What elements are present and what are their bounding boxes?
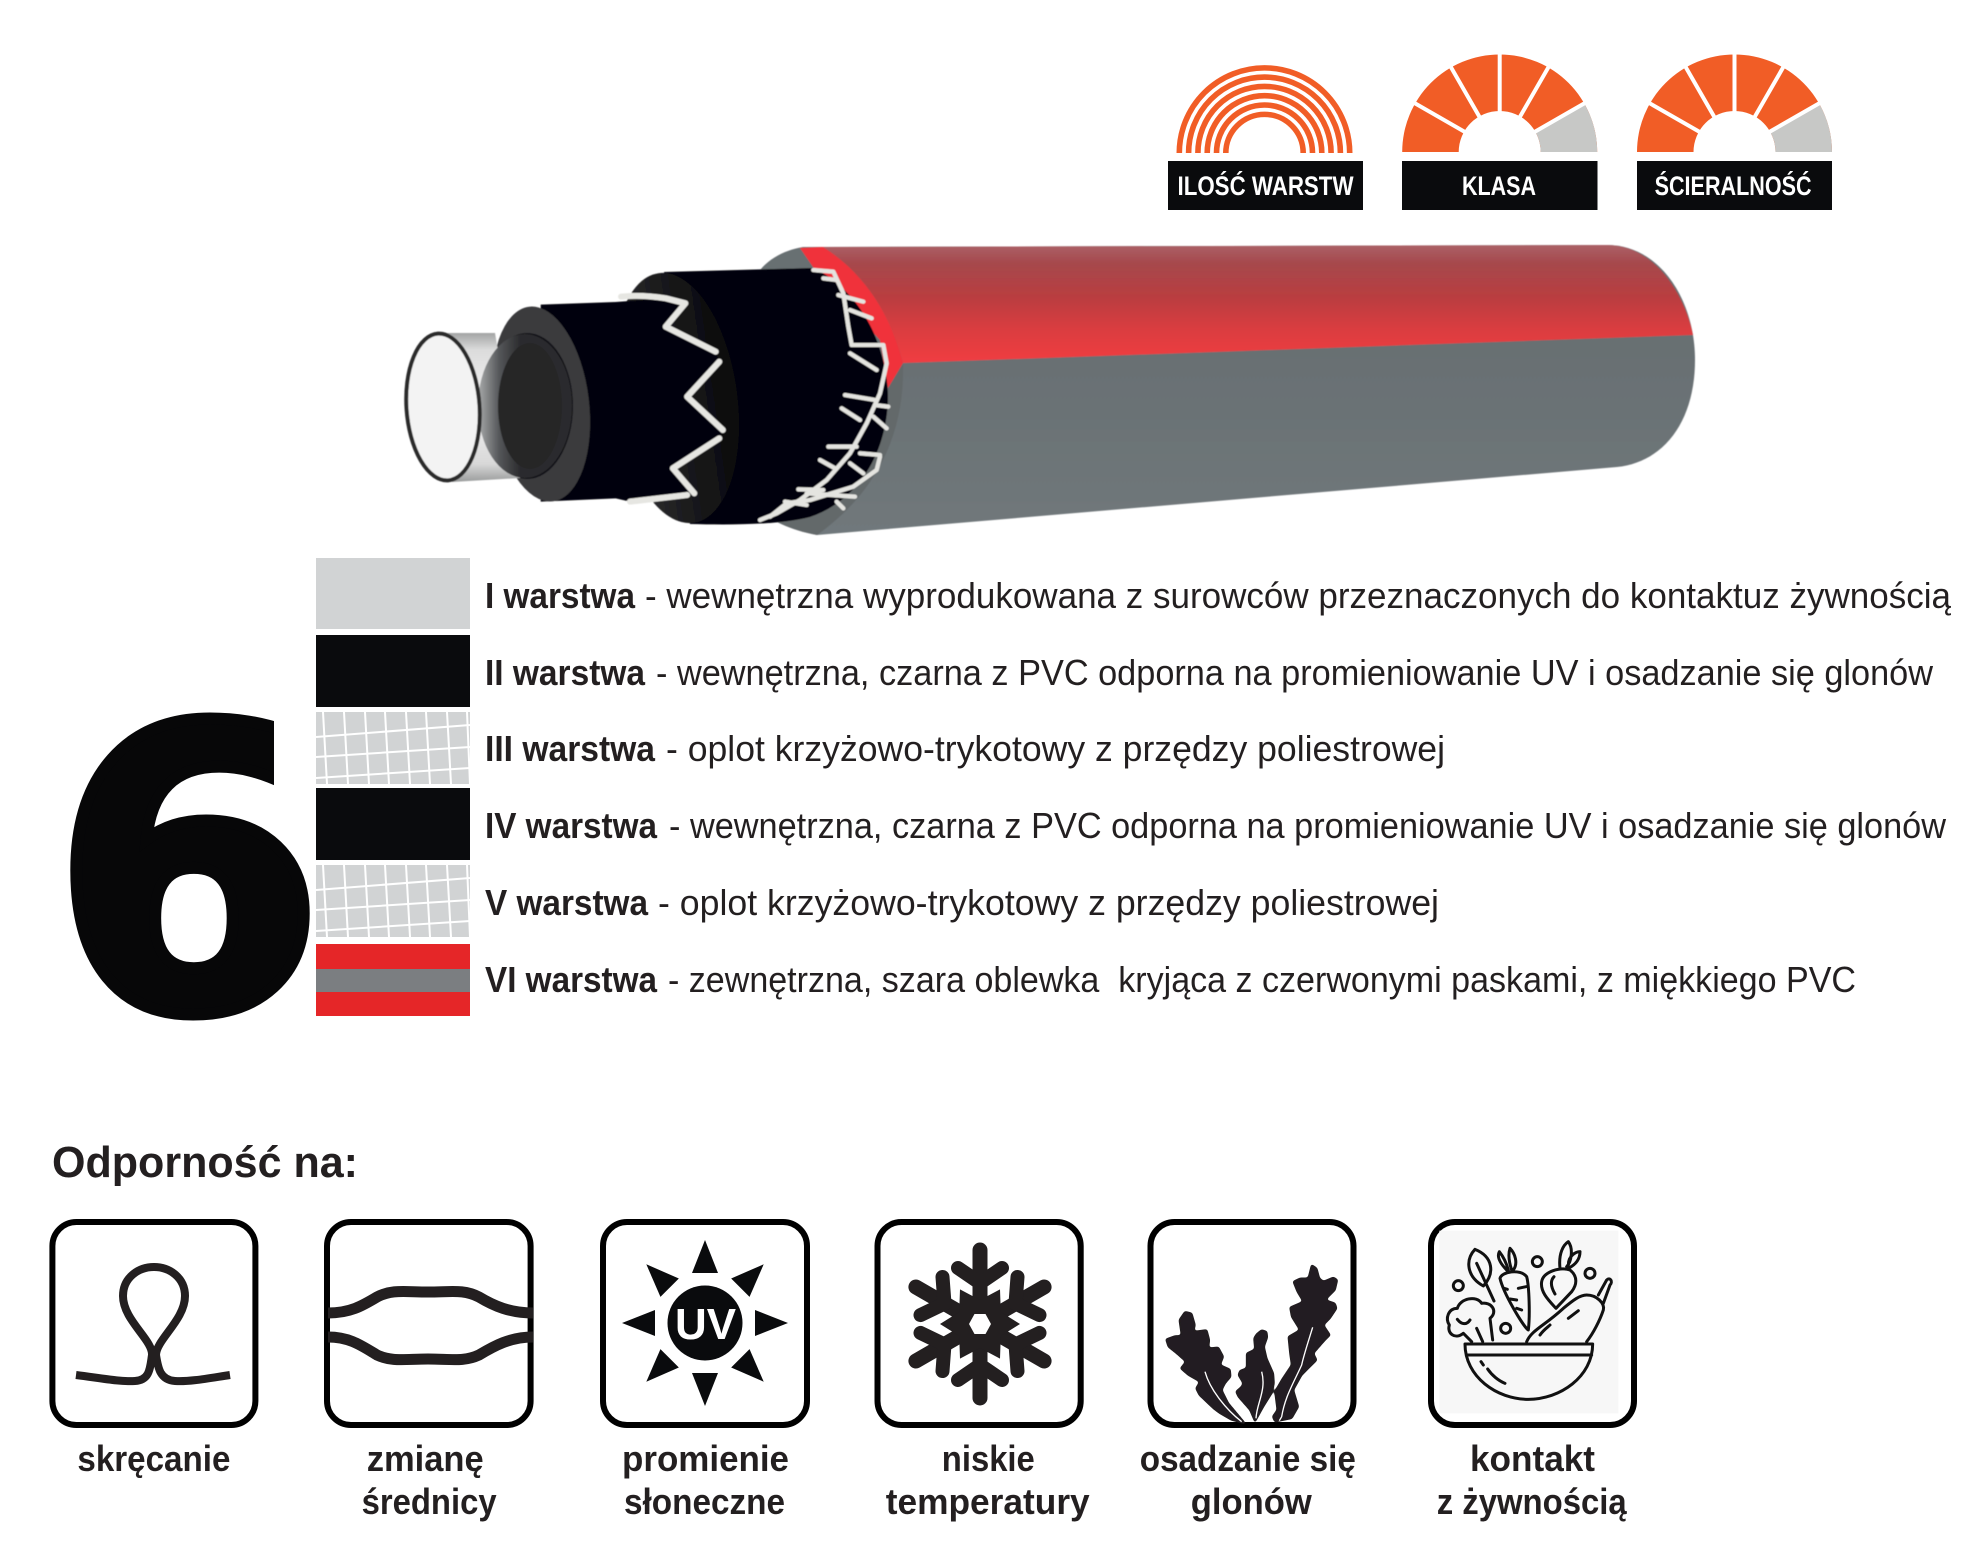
gray cut face: [760, 300, 903, 535]
inner braid zigzag: [621, 296, 723, 502]
text: layer V: V warstwa: [485, 882, 649, 923]
icon tile: food contact: [1431, 1222, 1634, 1425]
big number 6: 6: [52, 646, 325, 1102]
label: food contact: z żywnością: [1437, 1481, 1628, 1522]
icon tile: UV sun: UV: [675, 1300, 737, 1349]
icon tile: low temperature snowflake: [878, 1222, 1081, 1425]
label: ilość warstw: ILOŚĆ WARSTW: [1178, 170, 1354, 201]
outer braid: [760, 270, 888, 520]
label: algae: osadzanie się: [1140, 1438, 1356, 1479]
text: layer VI: - zewnętrzna, szara oblewka kryjąca z czerwonymi paskami, z miękkiego PVC: [668, 959, 1856, 1000]
text: layer VI: VI warstwa: [485, 959, 658, 1000]
text: layer I: - wewnętrzna wyprodukowana z surowców przeznaczonych do kontaktuz żywnością: [645, 575, 1952, 616]
icon: class gauge: [1402, 52, 1597, 152]
text: layer I: I warstwa: [485, 575, 636, 616]
swatch: layer II: [316, 635, 470, 707]
text: layer IV: IV warstwa: [485, 805, 658, 846]
label: food contact: [1437, 1438, 1628, 1522]
heading: resistance: Odporność na:: [52, 1138, 358, 1187]
swatch: layer VI: [316, 944, 470, 1016]
red stripe: [823, 245, 1693, 363]
label: low temperatures: niskie: [942, 1438, 1035, 1479]
icon tile: diameter change: [327, 1222, 533, 1425]
label: ilość warstw: [1168, 161, 1363, 210]
label: diameter change: zmianę: [367, 1438, 484, 1479]
label: klasa: KLASA: [1462, 171, 1536, 201]
label: low temperatures: [886, 1438, 1090, 1522]
bright red cut face: [800, 247, 903, 388]
text: layer II: II warstwa: [485, 652, 646, 693]
tube layer II face: [481, 301, 601, 507]
swatch: layer V mesh: [316, 865, 470, 937]
label: sunlight: [622, 1438, 789, 1522]
text: layer II: - wewnętrzna, czarna z PVC odporna na promieniowanie UV i osadzanie się glonów: [656, 652, 1934, 693]
clear inner tube: [440, 333, 520, 482]
icon tile: twisting: [52, 1222, 255, 1425]
label: low temperatures: temperatury: [886, 1481, 1090, 1522]
label: sunlight: promienie: [622, 1438, 789, 1479]
text: layer III: - oplot krzyżowo-trykotowy z przędzy poliestrowej: [666, 728, 1445, 769]
label: diameter change: [362, 1438, 497, 1522]
label: sunlight: słoneczne: [624, 1481, 785, 1522]
text: layer III: III warstwa: [485, 728, 656, 769]
label: algae: glonów: [1191, 1481, 1313, 1522]
outer gray jacket: [760, 245, 1695, 535]
black tube layer IV: [664, 268, 888, 524]
text: layer V: - oplot krzyżowo-trykotowy z przędzy poliestrowej: [658, 882, 1439, 923]
swatch: layer IV: [316, 788, 470, 860]
label: twisting: skręcanie: [77, 1438, 230, 1479]
icon tile: algae: [1150, 1222, 1354, 1425]
swatch: layer I: [316, 558, 470, 629]
swatch: layer III mesh: [316, 712, 470, 784]
tube face: [598, 265, 754, 531]
black tube layer II body: [541, 298, 723, 502]
hose cross-section illustration: [401, 245, 1695, 535]
icon: abrasion gauge: [1637, 52, 1832, 152]
icon tile: UV sun: [603, 1222, 807, 1425]
label: ścieralność: ŚCIERALNOŚĆ: [1655, 170, 1812, 201]
label: ścieralność: [1637, 161, 1832, 210]
label: algae: [1140, 1438, 1356, 1522]
label: klasa: [1402, 161, 1598, 210]
icon: layer count rainbow: [1179, 68, 1350, 153]
label: food contact: kontakt: [1470, 1438, 1595, 1479]
label: diameter change: średnicy: [362, 1481, 497, 1522]
